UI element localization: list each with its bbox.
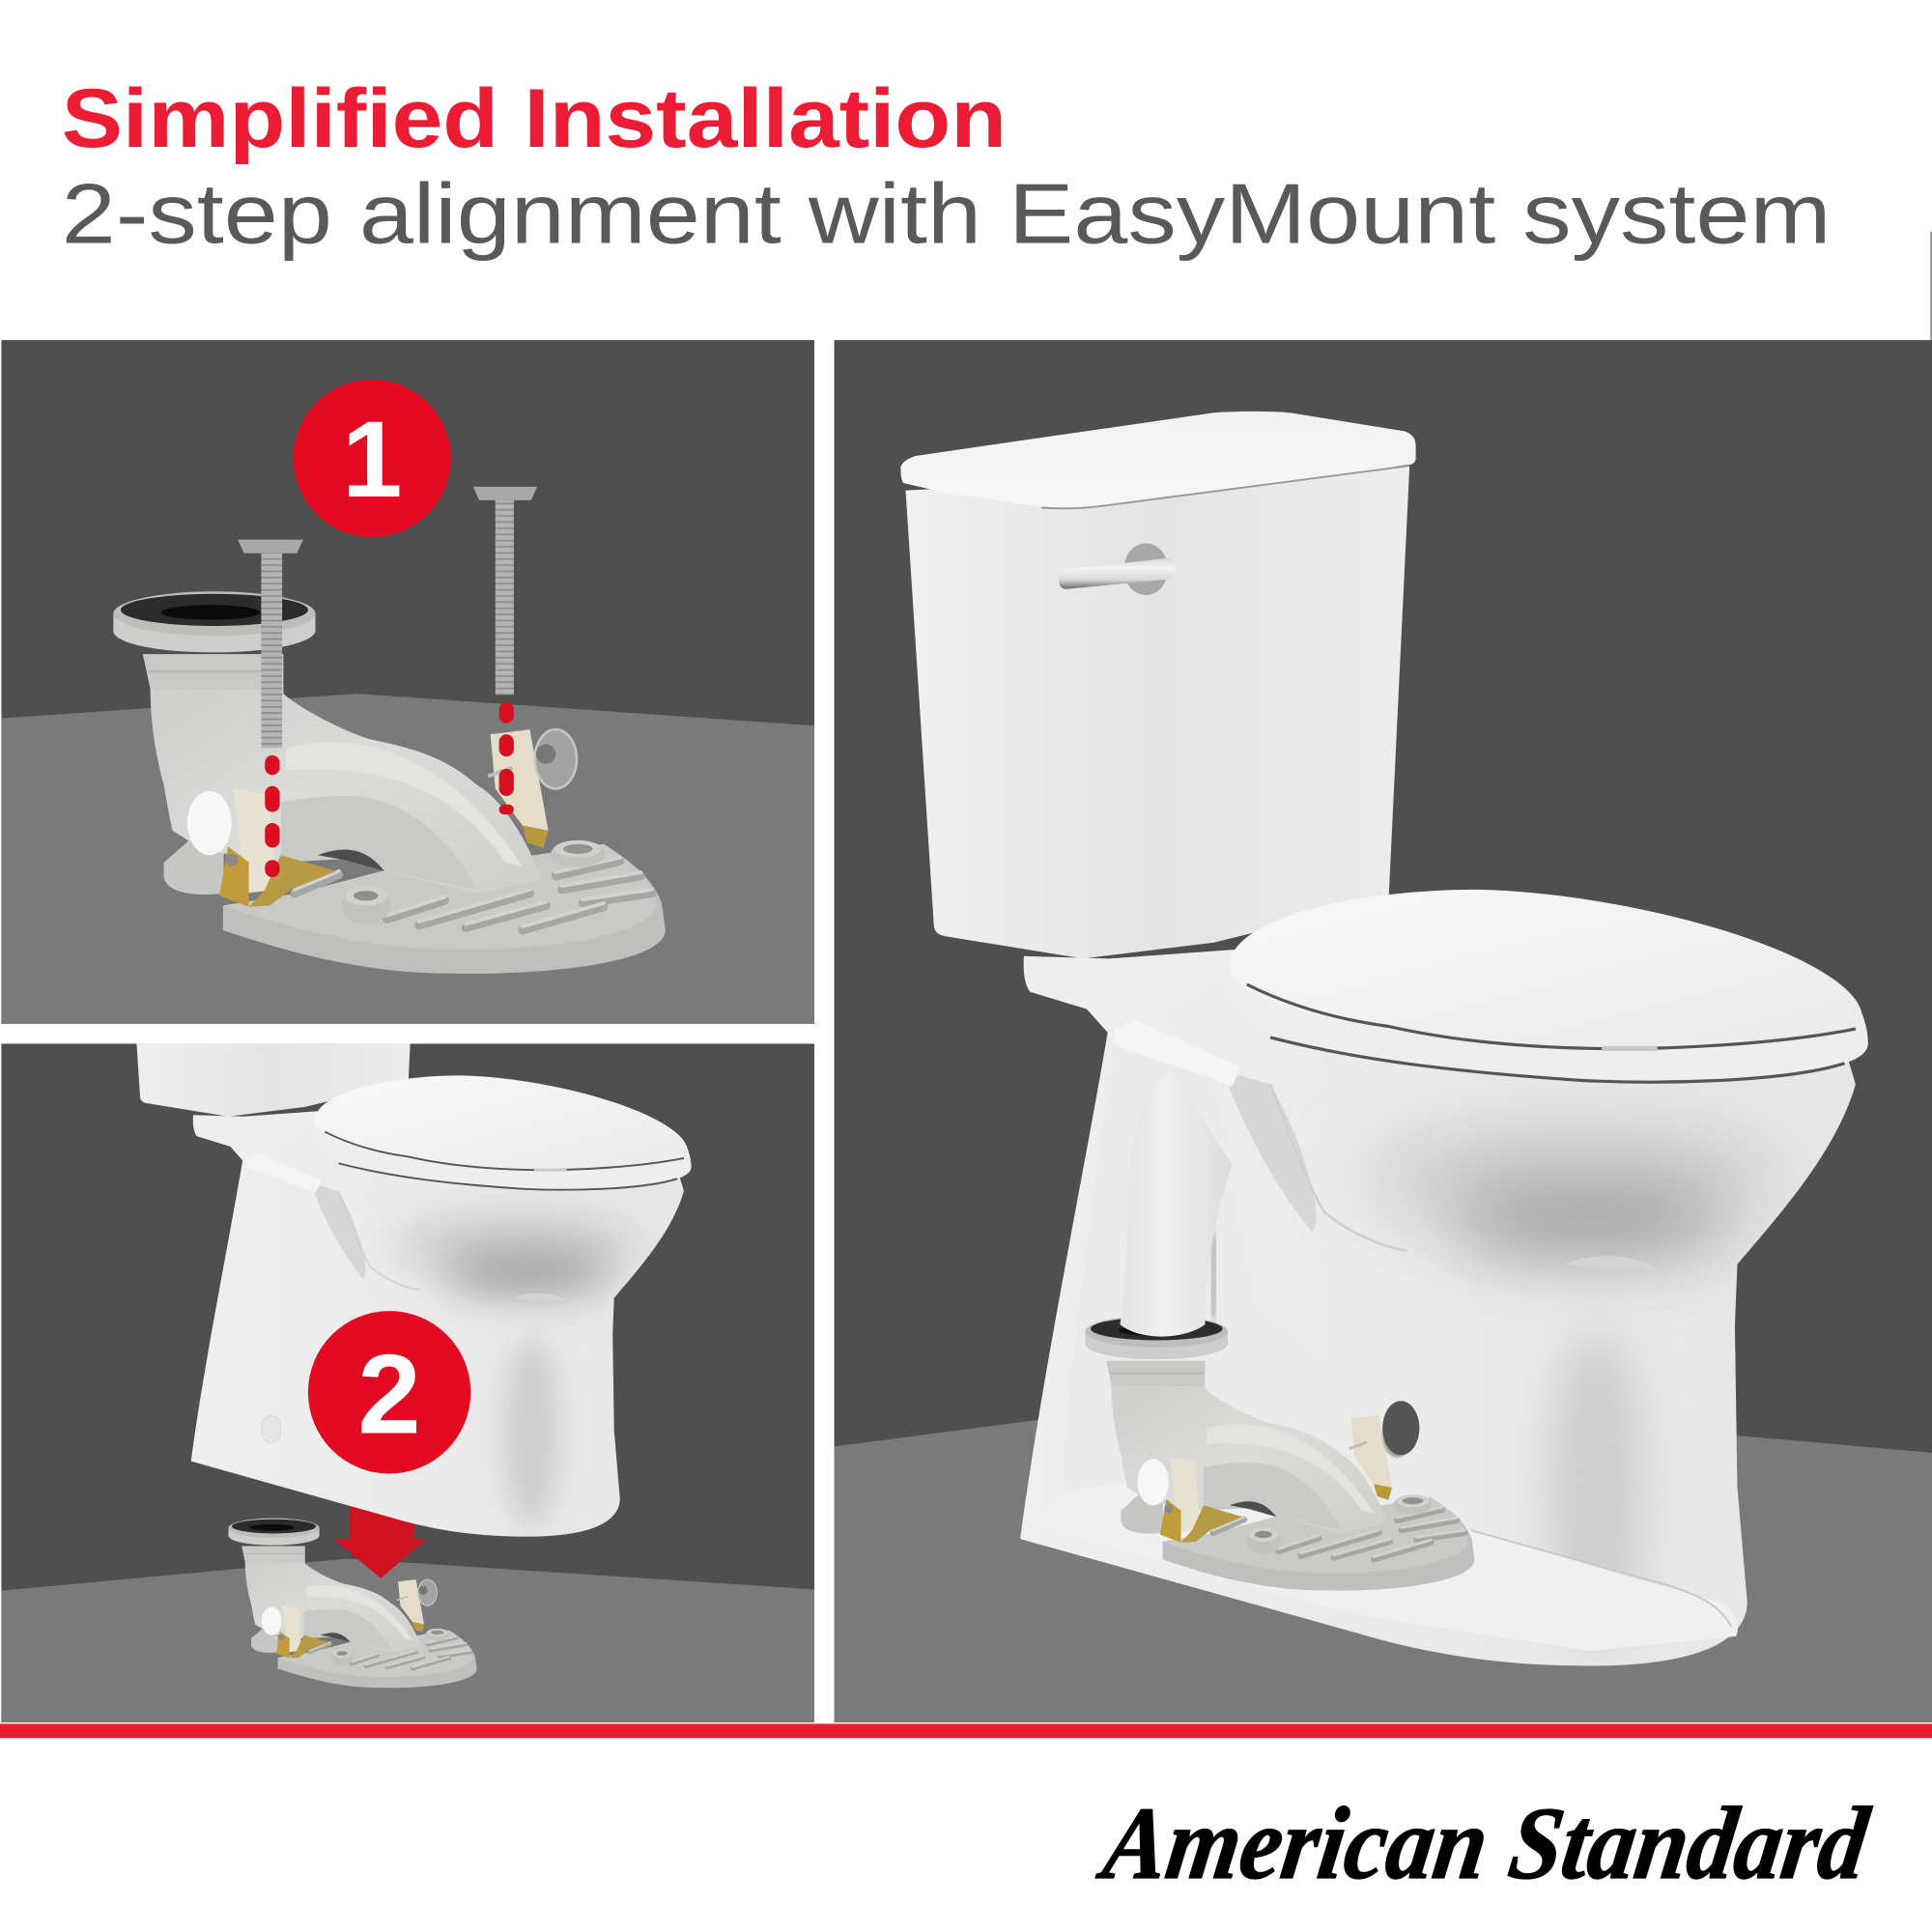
- badge: step 2: [308, 1311, 470, 1474]
- panel: installed toilet: [835, 340, 1932, 1722]
- floor: [835, 1417, 1932, 1722]
- title: Simplified Installation: [62, 71, 1007, 165]
- panel: step 2: [1, 1043, 815, 1723]
- cavity: [1183, 1068, 1738, 1651]
- small trapway: [228, 1519, 477, 1688]
- left bolt: [238, 540, 303, 748]
- wall: [1, 1043, 814, 1722]
- badge: step 2: 2: [357, 1330, 421, 1457]
- badge: step 1: [294, 380, 451, 537]
- left red dashed guide: [265, 755, 280, 877]
- red footer bar: [0, 1723, 1932, 1738]
- trapway assembly: [113, 591, 666, 974]
- outlet pipe: [1121, 1133, 1233, 1337]
- logo: American Standard: American Standard: [1092, 1786, 1877, 1901]
- wall: [1, 340, 814, 1024]
- dimple: [261, 1416, 281, 1443]
- wall: [835, 340, 1932, 1722]
- floor: [1, 1559, 814, 1722]
- right red dashed guide: [499, 702, 514, 814]
- down arrow: [334, 1506, 427, 1578]
- toilet: [900, 412, 1868, 1665]
- right bolt: [473, 487, 537, 695]
- subtitle: 2-step alignment with EasyMount system: [62, 165, 1831, 261]
- floor: [1, 694, 814, 1024]
- trapway in toilet: [1086, 1316, 1474, 1591]
- toilet lowered: [137, 1043, 692, 1537]
- edge line: [1930, 232, 1932, 340]
- badge: step 1: 1: [342, 398, 402, 520]
- panel: step 1: [1, 340, 814, 1024]
- dark washer: [1382, 1401, 1419, 1455]
